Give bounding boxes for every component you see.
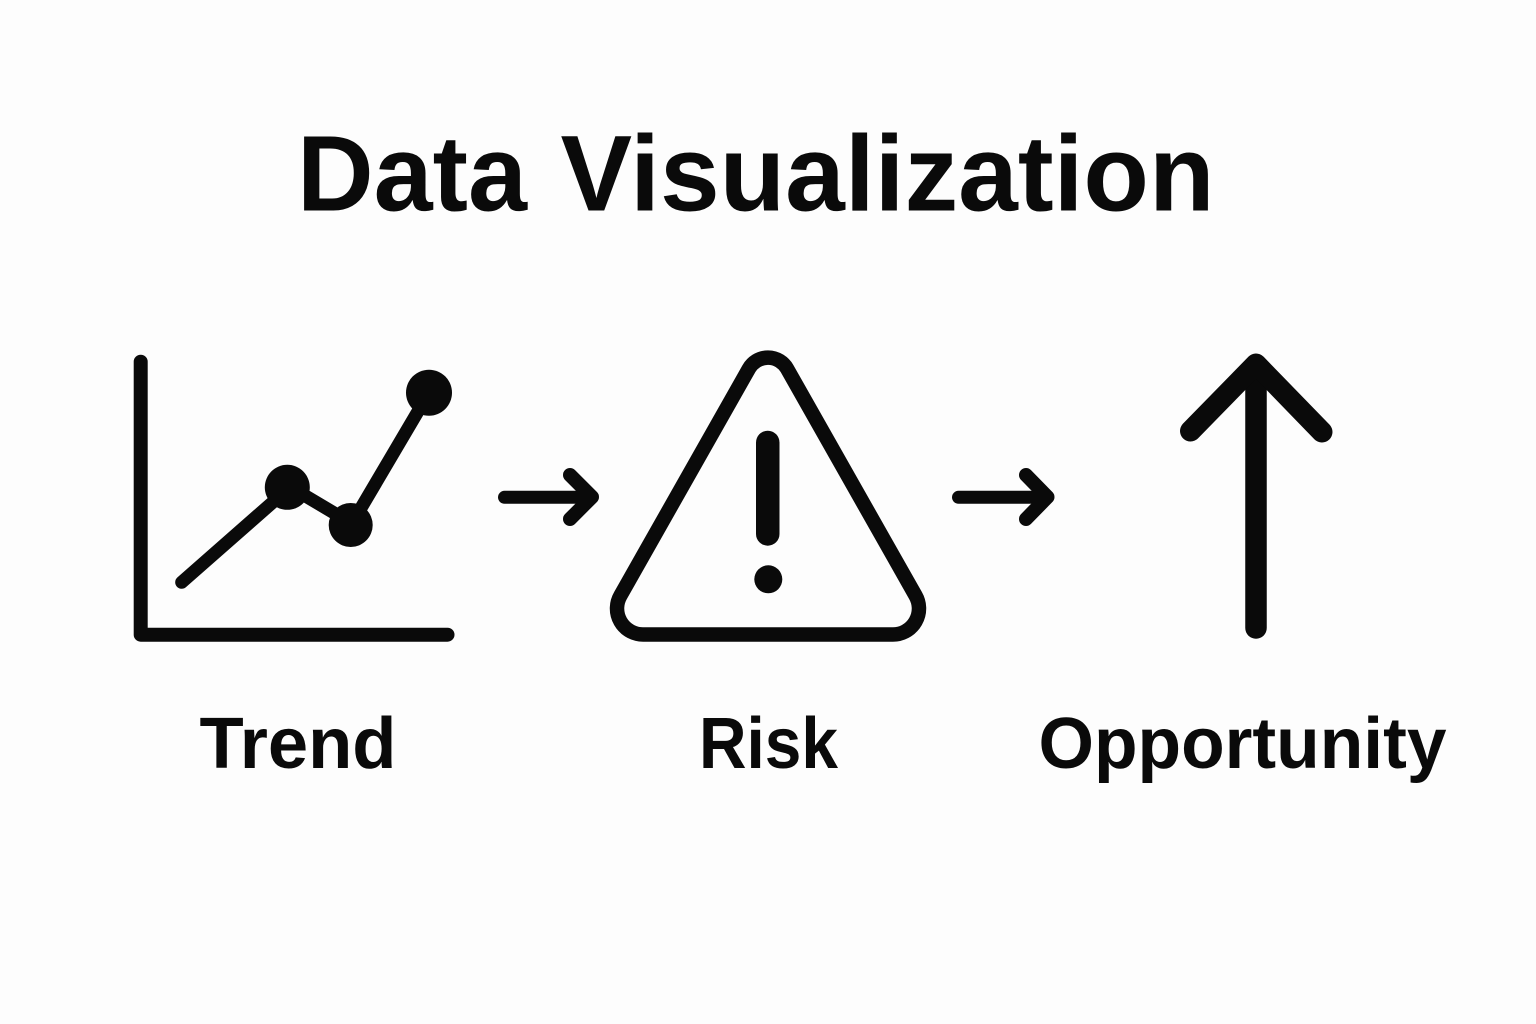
arrow: trend to risk bbox=[504, 475, 592, 519]
label: Trend: Trend bbox=[200, 704, 396, 784]
arrow: risk to opportunity bbox=[958, 475, 1048, 519]
icon: up arrow bbox=[1190, 364, 1322, 628]
title: Visualization bbox=[560, 112, 1214, 234]
label: Opportunity: Opportunity bbox=[1038, 704, 1446, 784]
icon: warning triangle bbox=[617, 358, 919, 634]
label: Risk: Risk bbox=[699, 704, 839, 784]
title: Data bbox=[297, 112, 528, 234]
icon: trend chart bbox=[141, 362, 452, 635]
